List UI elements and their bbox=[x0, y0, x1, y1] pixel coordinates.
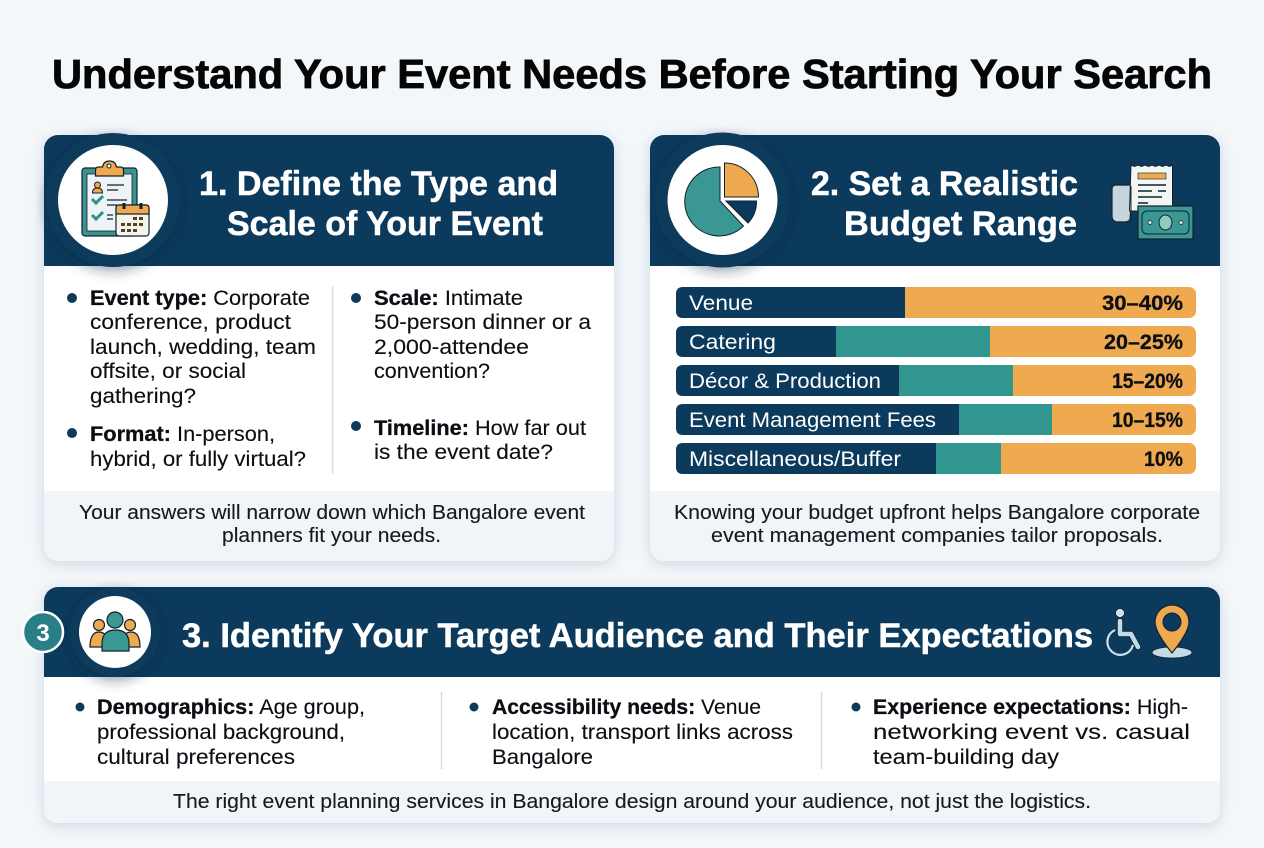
bar: venue bbox=[676, 287, 1196, 318]
title: Understand Your Event Needs Before Starting Your Search bbox=[52, 51, 1212, 97]
icon: receipt and money bbox=[1112, 165, 1193, 239]
text block: accessibility needs: location, transport links across bbox=[492, 721, 793, 744]
text block: timeline bbox=[351, 417, 586, 464]
heading bbox=[199, 165, 558, 243]
text block: format bbox=[67, 423, 306, 471]
text block: event type: conference, product bbox=[90, 311, 291, 334]
bar: catering: 20–25% bbox=[1104, 331, 1183, 354]
text block: scale: 2,000-attendee bbox=[374, 336, 529, 359]
footer note: event management companies tailor proposals. bbox=[711, 525, 1163, 547]
text block: demographics bbox=[76, 696, 365, 769]
text block: format: Format: In-person, bbox=[90, 423, 275, 446]
icon: pie chart bbox=[655, 132, 790, 268]
heading: 2. Set a Realistic bbox=[811, 165, 1078, 203]
icon: location pin bbox=[1152, 605, 1192, 658]
bar: event management fees: Event Management Fees bbox=[689, 409, 936, 432]
heading bbox=[811, 165, 1078, 243]
bar: event management fees: 10–15% bbox=[1112, 409, 1183, 432]
text block: demographics: professional background, bbox=[97, 721, 345, 744]
panel: identify your target audience bbox=[23, 587, 1220, 823]
text block: experience expectations: networking event vs. casual bbox=[873, 721, 1190, 744]
heading: 1. Define the Type and bbox=[199, 165, 558, 203]
footer note: The right event planning services in Bangalore design around your audience, not just the logistics. bbox=[173, 791, 1091, 813]
text block: scale: 50-person dinner or a bbox=[374, 311, 591, 334]
bar: venue: Venue bbox=[689, 292, 753, 315]
footer note: Your answers will narrow down which Bangalore event bbox=[79, 502, 585, 524]
text block: demographics: cultural preferences bbox=[97, 746, 295, 769]
text block: event type: offsite, or social bbox=[90, 360, 246, 383]
text block: event type: Event type: Corporate bbox=[90, 287, 310, 310]
bar: decor and production bbox=[676, 365, 1196, 396]
footer note: Knowing your budget upfront helps Bangalore corporate bbox=[674, 502, 1200, 524]
footer note bbox=[79, 502, 585, 547]
panel: set a realistic budget range bbox=[650, 132, 1220, 561]
badge: number 3 bbox=[23, 612, 63, 652]
panel: define the type and scale bbox=[44, 133, 614, 561]
bar: decor and production: 15–20% bbox=[1112, 370, 1183, 393]
bar: miscellaneous buffer bbox=[676, 443, 1196, 474]
icon: clipboard and calendar bbox=[46, 133, 180, 267]
text block: accessibility needs: Accessibility needs: Venue bbox=[492, 696, 761, 719]
text block: scale: convention? bbox=[374, 360, 490, 383]
bar: catering: Catering bbox=[689, 331, 776, 354]
icon: audience bbox=[70, 587, 160, 677]
badge: number 3: 3 bbox=[36, 620, 50, 647]
text block: scale: Scale: Intimate bbox=[374, 287, 523, 310]
bar: miscellaneous buffer: 10% bbox=[1144, 448, 1183, 471]
heading: Budget Range bbox=[844, 205, 1077, 243]
bar: miscellaneous buffer: Miscellaneous/Buffer bbox=[689, 448, 901, 471]
heading: 3. Identify Your Target Audience and Their Expectations bbox=[182, 617, 1093, 655]
heading: Scale of Your Event bbox=[227, 205, 543, 243]
text block: event type: launch, wedding, team bbox=[90, 336, 316, 359]
text block: experience expectations: team-building day bbox=[873, 746, 1060, 769]
bar: event management fees bbox=[676, 404, 1196, 435]
footer note: planners fit your needs. bbox=[222, 525, 441, 547]
text block: scale bbox=[351, 287, 591, 383]
icon: wheelchair bbox=[1107, 608, 1138, 655]
text block: event type: gathering? bbox=[90, 385, 196, 408]
text block: timeline: is the event date? bbox=[374, 441, 553, 464]
text block: format: hybrid, or fully virtual? bbox=[90, 448, 306, 471]
text block: demographics: Demographics: Age group, bbox=[97, 696, 365, 719]
text block: experience expectations bbox=[852, 696, 1190, 769]
footer note bbox=[674, 502, 1200, 547]
bar: venue: 30–40% bbox=[1102, 292, 1183, 315]
text block: timeline: Timeline: How far out bbox=[374, 417, 586, 440]
bar: decor and production: Décor & Production bbox=[689, 370, 881, 393]
text block: accessibility needs: Bangalore bbox=[492, 746, 593, 769]
text block: experience expectations: Experience expectations: High- bbox=[873, 696, 1188, 719]
bar: catering bbox=[676, 326, 1196, 357]
text block: event type bbox=[67, 287, 316, 408]
text block: accessibility needs bbox=[470, 696, 793, 769]
